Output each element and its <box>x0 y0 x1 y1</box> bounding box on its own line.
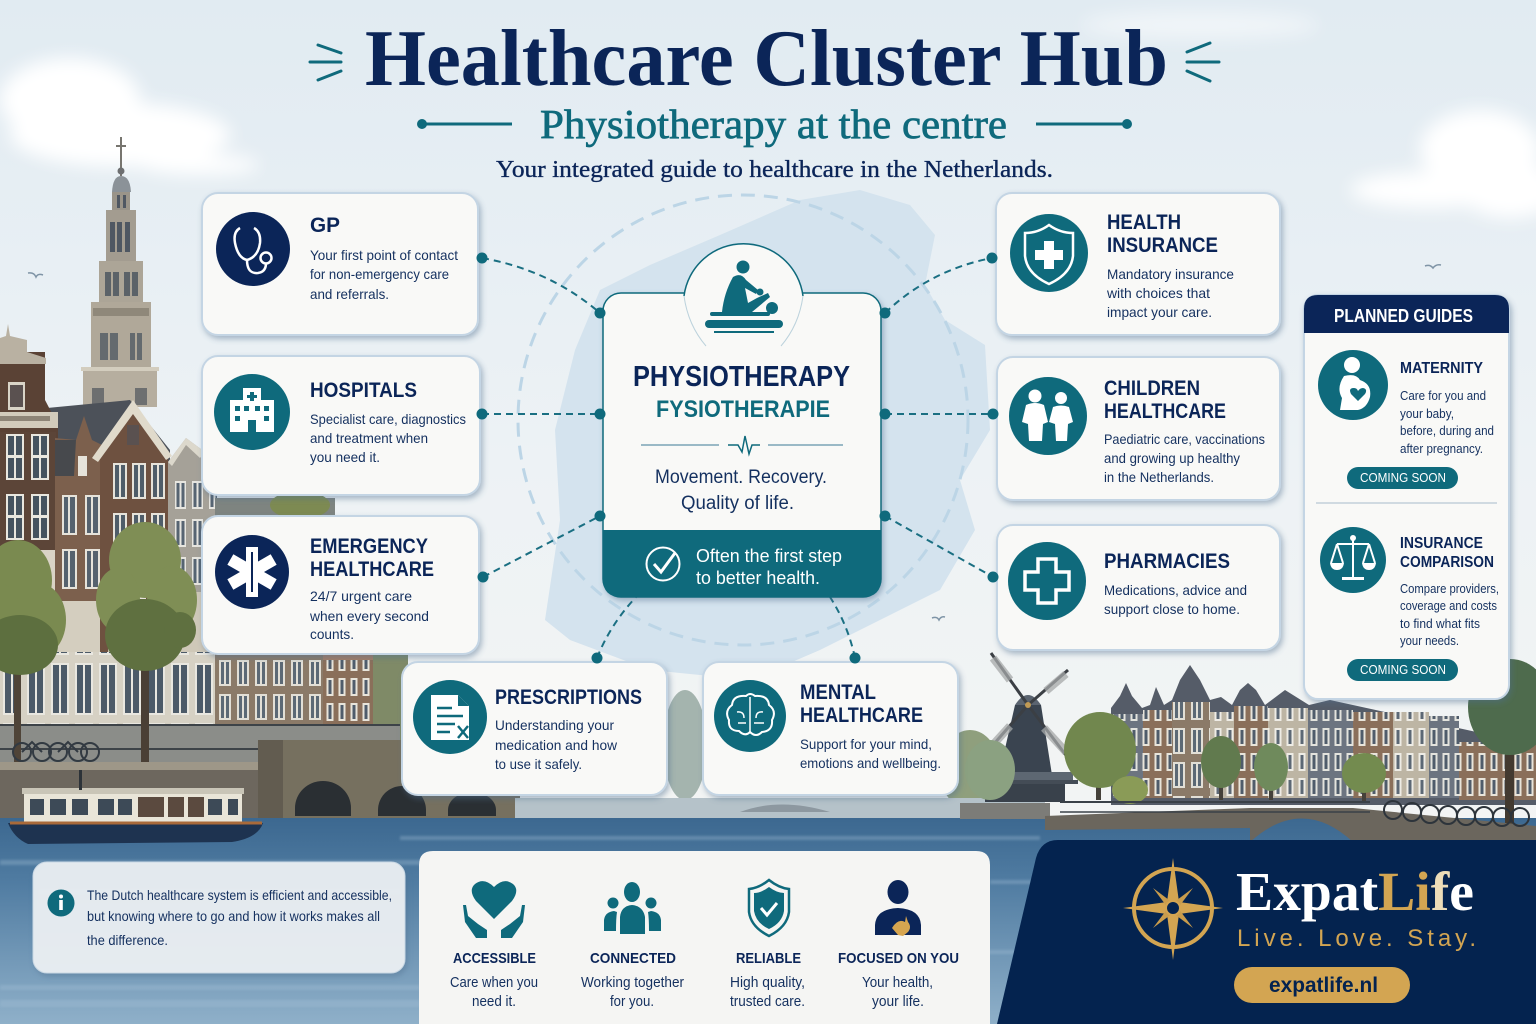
ECG divider <box>641 436 843 454</box>
panel: Planned guides: your needs. <box>1400 634 1459 648</box>
item: connected: for you. <box>610 994 654 1010</box>
badge: coming soon <box>1347 659 1458 681</box>
panel: info note: but knowing where to go and how it works makes all <box>87 908 380 924</box>
item: accessible: Care when you <box>450 975 538 991</box>
callout: first step band: to better health. <box>696 568 820 588</box>
item: accessible: ACCESSIBLE <box>453 950 536 967</box>
panel: Emergency healthcare: when every second <box>309 608 429 624</box>
panel: Planned guides <box>1304 295 1509 699</box>
panel: Health insurance: Mandatory insurance <box>1107 266 1234 282</box>
badge: coming soon: COMING SOON <box>1360 663 1446 677</box>
panel: Pharmacies <box>997 525 1280 650</box>
panel: Physiotherapy centre: FYSIOTHERAPIE <box>656 396 830 423</box>
panel: Mental healthcare: HEALTHCARE <box>800 704 923 727</box>
panel: Pharmacies: PHARMACIES <box>1104 550 1230 573</box>
panel: Hospitals: you need it. <box>310 449 380 465</box>
panel: Planned guides: after pregnancy. <box>1400 442 1483 456</box>
badge: coming soon <box>1347 467 1458 489</box>
item: reliable: trusted care. <box>730 994 805 1010</box>
background: birds <box>28 265 1441 620</box>
brand name: ExpatLife <box>1236 861 1474 922</box>
background: trees on the left <box>0 522 197 770</box>
background: right bridge and bicycles <box>960 801 1536 842</box>
panel: Planned guides: before, during and <box>1400 424 1494 438</box>
panel: Planned guides: Compare providers, <box>1400 582 1499 596</box>
lower floors <box>0 652 216 728</box>
icon: children <box>1009 377 1087 455</box>
item: connected: Working together <box>581 975 684 991</box>
panel: Health insurance: impact your care. <box>1107 304 1212 320</box>
house B <box>55 416 108 760</box>
background: trees on the right <box>1064 659 1536 824</box>
background: left canal houses and church tower <box>0 137 408 766</box>
panel: Hospitals: and treatment when <box>310 430 428 446</box>
icon: star of life <box>215 535 289 609</box>
panel: Mental healthcare <box>703 662 958 795</box>
panel: Emergency healthcare: EMERGENCY <box>310 535 428 558</box>
item: focused on you <box>838 880 959 1010</box>
panel: Emergency healthcare: HEALTHCARE <box>310 558 434 581</box>
panel: Planned guides: MATERNITY <box>1400 360 1483 377</box>
panel: Emergency healthcare: counts. <box>310 626 354 642</box>
background: Netherlands map silhouette <box>545 190 990 680</box>
panel: Prescriptions: Understanding your <box>495 717 614 733</box>
background: water <box>0 818 1536 1024</box>
panel: Pharmacies: support close to home. <box>1104 601 1240 617</box>
icon: maternity <box>1318 350 1388 420</box>
panel: Health insurance: HEALTH <box>1107 211 1181 234</box>
background: right canal houses <box>965 665 1536 805</box>
icon: scales <box>1320 527 1386 593</box>
connector end dots <box>476 252 998 664</box>
panel: Hospitals <box>202 356 480 495</box>
title accent left <box>310 45 341 80</box>
panel: Children healthcare: in the Netherlands. <box>1104 469 1214 485</box>
panel: info note: The Dutch healthcare system is efficient and accessible, <box>87 887 392 903</box>
icon: info <box>48 890 74 916</box>
panel: Prescriptions: to use it safely. <box>495 756 582 772</box>
background: quay and stone bridge <box>0 740 520 820</box>
panel: GP: and referrals. <box>310 286 389 302</box>
item: connected <box>581 882 684 1010</box>
panel: info note: the difference. <box>87 932 168 948</box>
item: focused on you: your life. <box>872 994 924 1010</box>
panel: GP: Your first point of contact <box>310 247 458 263</box>
panel: Children healthcare: HEALTHCARE <box>1104 400 1226 423</box>
panel: Hospitals: Specialist care, diagnostics <box>310 411 466 427</box>
house D <box>168 438 217 760</box>
panel: Health insurance: with choices that <box>1106 285 1210 301</box>
panel: Hospitals: HOSPITALS <box>310 379 417 402</box>
icon: hospital <box>214 374 290 450</box>
item: accessible <box>450 881 538 1010</box>
panel: Physiotherapy centre: Movement. Recovery. <box>655 467 827 488</box>
badge: coming soon: COMING SOON <box>1360 471 1446 485</box>
icon: brain <box>714 680 786 752</box>
background: windmill <box>975 653 1078 802</box>
icon: shield <box>1010 214 1088 292</box>
panel: Prescriptions: medication and how <box>495 737 618 753</box>
panel: Mental healthcare: Support for your mind, <box>800 736 932 752</box>
item: focused on you: FOCUSED ON YOU <box>838 950 959 967</box>
house A with stone cap <box>0 324 58 760</box>
house C <box>92 400 172 760</box>
panel: Children healthcare: and growing up healthy <box>1104 450 1240 466</box>
panel: Physiotherapy centre <box>594 244 890 597</box>
panel: Children healthcare <box>997 357 1280 500</box>
panel: Planned guides: to find what fits <box>1400 617 1480 631</box>
brand tagline: Live. Love. Stay. <box>1237 925 1476 952</box>
background: dashed ring <box>518 195 968 645</box>
icon: compass logo <box>1123 858 1223 960</box>
panel: Planned guides: coverage and costs <box>1400 599 1497 613</box>
panel: info note <box>33 862 405 973</box>
panel: Physiotherapy centre: PHYSIOTHERAPY <box>633 361 850 393</box>
background: bicycles on the quay <box>13 742 99 761</box>
icon: stethoscope <box>216 212 290 286</box>
background: distant trees and shoreline centre <box>515 690 1045 820</box>
panel: Mental healthcare: MENTAL <box>800 681 876 704</box>
background: canal boat <box>8 770 263 844</box>
panel: Children healthcare: CHILDREN <box>1104 377 1200 400</box>
panel: Prescriptions: PRESCRIPTIONS <box>495 686 642 709</box>
panel: Planned guides: PLANNED GUIDES <box>1334 306 1473 326</box>
icon: prescription document <box>413 680 487 754</box>
panel: Pharmacies: Medications, advice and <box>1104 582 1247 598</box>
item: reliable: RELIABLE <box>736 950 801 967</box>
item: focused on you: Your health, <box>862 975 933 991</box>
panel: Planned guides: INSURANCE <box>1400 535 1483 552</box>
panel: Health insurance <box>996 193 1280 335</box>
item: accessible: need it. <box>472 994 516 1010</box>
callout: first step band: Often the first step <box>696 546 842 566</box>
subtitle rule left <box>418 120 512 128</box>
panel: Planned guides: COMPARISON <box>1400 554 1494 571</box>
subtitle rule right <box>1036 120 1130 128</box>
panel: GP <box>202 193 478 335</box>
tagline: Your integrated guide to healthcare in the Netherlands. <box>496 157 1053 183</box>
title: Healthcare Cluster Hub <box>365 15 1168 103</box>
title accent right <box>1187 43 1219 81</box>
panel: values strip <box>419 851 990 1024</box>
connectors between centre and cards <box>482 258 993 658</box>
item: reliable: High quality, <box>730 975 805 991</box>
panel: Children healthcare: Paediatric care, vaccinations <box>1104 431 1265 447</box>
panel: Health insurance: INSURANCE <box>1107 234 1218 257</box>
icon: pharmacy cross <box>1008 542 1086 620</box>
website pill <box>1234 967 1410 1003</box>
panel: Planned guides: Care for you and <box>1400 389 1486 403</box>
callout: first step band <box>603 530 881 597</box>
website pill: expatlife.nl <box>1269 974 1378 997</box>
panel: Planned guides: your baby, <box>1400 407 1454 421</box>
panel: Prescriptions <box>402 662 667 795</box>
panel: Physiotherapy centre: Quality of life. <box>681 493 794 514</box>
item: reliable <box>730 880 805 1010</box>
item: connected: CONNECTED <box>590 950 676 967</box>
panel: ExpatLife brand <box>997 840 1536 1024</box>
subtitle: Physiotherapy at the centre <box>540 101 1007 147</box>
icon: therapist circle <box>684 244 803 346</box>
panel: GP: GP <box>310 214 340 237</box>
panel: Mental healthcare: emotions and wellbeing. <box>800 755 941 771</box>
panel: GP: for non-emergency care <box>310 266 449 282</box>
panel: Emergency healthcare <box>202 516 479 654</box>
panel: Emergency healthcare: 24/7 urgent care <box>310 588 412 604</box>
